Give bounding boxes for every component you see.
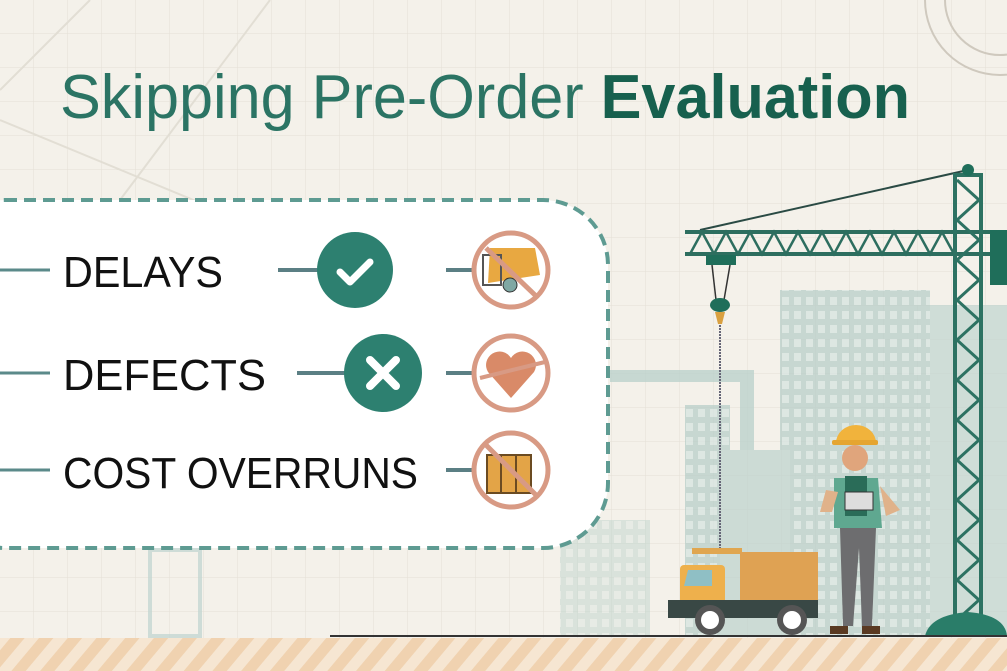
icon: prohibited cabinet [474,433,548,507]
row: cost overruns: COST OVERRUNS [63,449,418,498]
ground [0,638,1007,671]
crane [685,164,1007,636]
row: defects: DEFECTS [63,351,266,400]
row: delays [0,232,548,308]
icon: prohibited machinery [474,233,548,307]
row: defects [0,334,548,412]
title: Skipping Pre-Order Evaluation [60,63,910,132]
truck [668,548,818,635]
worker [820,425,900,634]
icon: heart prohibited [474,336,548,410]
row: cost overruns [0,433,548,507]
icon: cross [344,334,422,412]
row: delays: DELAYS [63,248,223,297]
background buildings [150,290,1007,636]
icon: check [317,232,393,308]
panel: risks [0,200,608,548]
